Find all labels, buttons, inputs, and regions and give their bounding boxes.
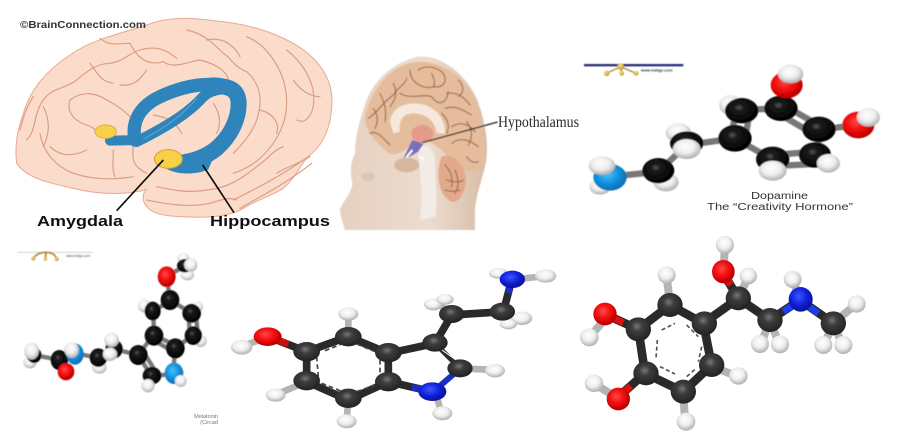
panel: serotonin molecule [231, 268, 556, 428]
caption: Circad: (Circad [200, 420, 218, 426]
label: Amygdala: Amygdala [37, 213, 124, 230]
cerebrum [364, 62, 484, 171]
bonds [34, 266, 198, 377]
nitrogen [593, 164, 627, 191]
caption: Melatonin: Melatonin [194, 414, 218, 420]
indigo banner: www.indigo.com [640, 68, 673, 73]
pituitary [403, 140, 423, 158]
panel: head with hypothalamus [340, 57, 498, 230]
fornix and hippocampus [110, 84, 239, 173]
hydrogens [231, 268, 556, 428]
cerebellum [438, 155, 466, 202]
brain credit text: ©BrainConnection.com [20, 20, 146, 31]
nitrogen: ring [418, 382, 446, 401]
caption: Dopamine: Dopamine [751, 191, 809, 202]
pointer line: amygdala [117, 160, 163, 211]
sinus shading [394, 158, 419, 172]
hydrogens front [589, 65, 880, 181]
hydrogens behind [589, 95, 741, 195]
brain folds [20, 30, 320, 208]
nitrogens [66, 343, 183, 384]
amine hydrogen [784, 272, 801, 288]
hydrogens [580, 236, 866, 431]
oxygens [593, 260, 735, 410]
amygdala left [95, 125, 116, 138]
hydrogens front [24, 258, 197, 392]
indigo banner [584, 63, 683, 76]
panel: melatonin molecule [17, 252, 207, 392]
carbons [642, 96, 836, 183]
label: Hypothalamus: Hypothalamus [498, 114, 579, 131]
label: Hippocampus: Hippocampus [210, 213, 330, 230]
carbons [293, 303, 515, 408]
oxygens [771, 72, 874, 138]
eye [362, 172, 375, 181]
nitrogen: amine [500, 271, 525, 288]
nitrogen [789, 287, 813, 312]
carbons [27, 259, 202, 384]
sulci [368, 67, 478, 193]
hypothalamus [411, 125, 433, 143]
indigo banner [17, 252, 93, 261]
bonds [610, 85, 857, 177]
oxygen: carbonyl [58, 363, 74, 380]
corpus callosum [390, 103, 445, 133]
brainstem [418, 146, 436, 220]
leader line [422, 122, 498, 143]
bonds [590, 247, 855, 420]
hydrogens behind [23, 253, 207, 374]
panel: adrenaline molecule [580, 236, 866, 431]
head silhouette [340, 57, 487, 230]
caption: The Creativity Hormone: The “Creativity Hormone” [707, 202, 853, 213]
panel: brain with amygdala and hippocampus [16, 18, 332, 217]
brain outline [16, 18, 332, 217]
pointer line: hippocampus [203, 165, 234, 213]
amygdala right [154, 150, 182, 168]
oxygen [254, 327, 282, 346]
carbons [626, 286, 846, 404]
bonds [242, 274, 545, 420]
oxygen: methoxy [158, 266, 176, 287]
indigo banner: www.indigo.com [66, 254, 90, 258]
panel: dopamine molecule [584, 63, 880, 195]
